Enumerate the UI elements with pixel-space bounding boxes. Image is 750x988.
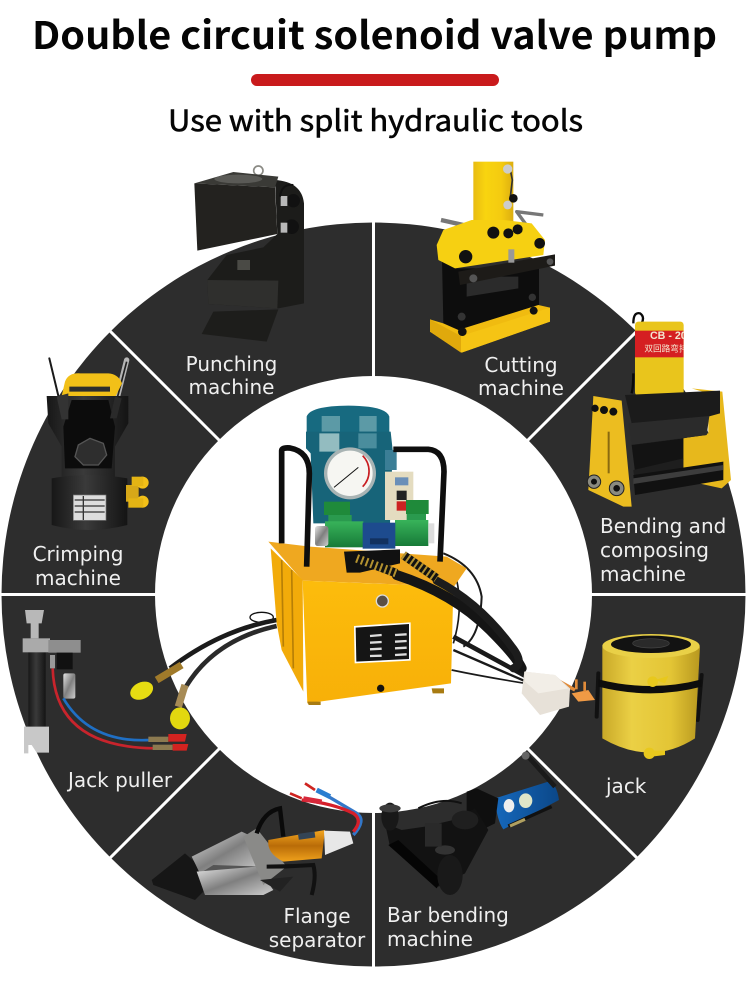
pump: tank fins: [271, 548, 303, 692]
red divider bar: [251, 74, 499, 86]
pump: pressure gauge: [324, 447, 376, 499]
label: crimping machine: Crimping: [33, 542, 123, 566]
tool: bending and composing machine: 双回路弯排: [644, 343, 688, 355]
tool: cutting machine: [430, 162, 555, 353]
pump: data plate: [354, 622, 411, 663]
pump: manifold block: [344, 549, 400, 573]
label: cutting machine: Cutting: [484, 353, 558, 377]
tool: bar bending machine: [379, 752, 559, 895]
pump: top plate: [268, 542, 467, 587]
pump: drain: [377, 685, 384, 692]
pump: high pressure hoses: [357, 555, 522, 668]
label: crimping machine: machine: [35, 566, 121, 590]
label: flange separator: separator: [269, 928, 366, 952]
pump: tank front: [303, 581, 453, 703]
label: jack: jack: [605, 774, 647, 798]
pump: switch box: [385, 472, 413, 520]
label: punching machine: Punching: [186, 352, 277, 376]
label: bar bending machine: Bar bending: [387, 903, 509, 927]
label: jack puller: Jack puller: [66, 768, 173, 792]
label: punching machine: machine: [189, 375, 274, 399]
tool: jack: [597, 634, 702, 759]
pump: wires: [443, 553, 530, 683]
left hoses with yellow caps: [127, 612, 277, 729]
foot switch and plug: [522, 672, 595, 715]
label: bar bending machine: machine: [387, 927, 473, 951]
tool: punching machine: [194, 166, 304, 342]
tool: bending and composing machine: CB - 20: [650, 330, 687, 342]
label: bending and composing machine: machine: [600, 562, 686, 586]
label: flange separator: Flange: [284, 904, 350, 928]
label: cutting machine: machine: [478, 376, 564, 400]
segmented tool ring: [0, 210, 750, 980]
tool: crimping machine: [47, 358, 149, 530]
label: bending and composing machine: Bending and: [600, 514, 726, 538]
pump: green solenoids: [315, 500, 434, 549]
subtitle: Use with split hydraulic tools: [168, 98, 583, 140]
pump: oil sight: [376, 595, 388, 607]
tool: flange separator: [152, 783, 361, 900]
hydraulic pump: [268, 406, 530, 705]
title: Double circuit solenoid valve pump: [32, 5, 717, 60]
tool: jack puller: [23, 610, 188, 753]
pump: motor: [306, 406, 397, 523]
label: bending and composing machine: composing: [600, 538, 709, 562]
tool: bending and composing machine: [587, 313, 731, 507]
pump: handles: [282, 448, 309, 567]
pump: feet: [307, 702, 321, 705]
